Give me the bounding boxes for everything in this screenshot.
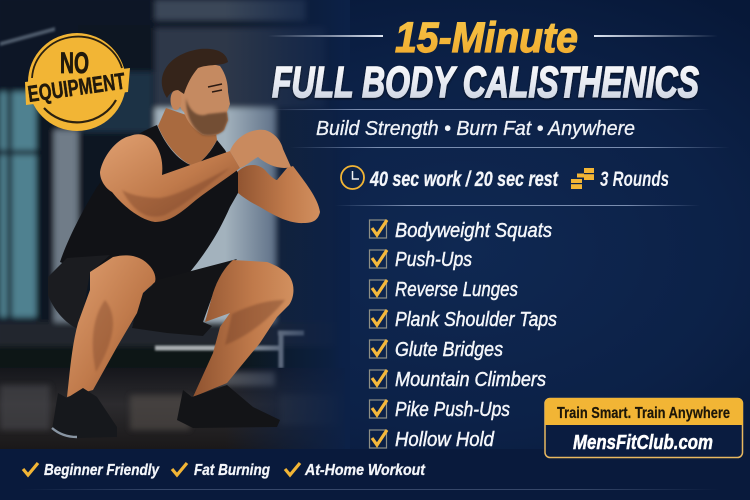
tank top [60,125,238,292]
icon: clock [341,166,364,189]
photo: man in squat [48,49,320,438]
sole highlight [52,428,77,437]
neck [158,108,217,166]
timing: work and rest: 40 sec work / 20 sec rest [369,168,559,191]
gym bench frame [155,333,304,368]
rule left of headline [268,35,383,37]
shorts [48,255,110,330]
ear [170,90,182,110]
right shoe [177,385,280,428]
exercise 6: Mountain Climbers [395,369,546,391]
left shoe [52,388,117,438]
far arm [236,165,320,223]
eye and brow [208,84,222,92]
left leg muscle shading [93,300,113,372]
near arm and shoulder [100,134,240,222]
exercise 8: Hollow Hold [395,429,495,451]
call to action box [545,398,743,458]
checkbox 7 [370,400,387,418]
head [177,64,230,135]
benefit: fat burning: Fat Burning [194,462,270,479]
exercise 5: Glute Bridges [395,339,503,361]
arm muscle shading [122,168,230,217]
badge: no equipment: NO [60,47,89,80]
badge: no equipment: EQUIPMENT [26,68,127,107]
exercise 7: Pike Push-Ups [395,399,510,421]
check: fat burning [172,463,187,475]
exercise 2: Push-Ups [395,249,472,271]
icon: rounds [571,168,594,189]
right leg muscle shading [225,300,285,345]
rule under title [270,109,710,110]
hair [162,49,228,98]
rule right of headline [594,35,718,37]
benefit: at-home workout: At-Home Workout [304,462,426,479]
benefit: beginner friendly: Beginner Friendly [44,462,160,479]
cta website: MensFitClub.com [573,432,713,454]
checkbox 1 [370,220,387,238]
exercise 1: Bodyweight Squats [395,220,552,242]
badge: no equipment [25,33,130,131]
checkbox 8 [370,430,387,448]
checkbox 3 [370,280,387,298]
exercise 4: Plank Shoulder Taps [395,309,557,331]
check: beginner friendly [23,463,38,475]
benefits row [23,462,426,479]
checkbox 6 [370,370,387,388]
photo: gym background [0,0,350,449]
subtitle: Build Strength • Burn Fat • Anywhere [316,118,635,140]
checkbox 5 [370,340,387,358]
beard shading [186,98,228,135]
rule under subtitle [290,147,730,148]
title: 15-Minute: 15-Minute [395,14,578,62]
checkbox 4 [370,310,387,328]
exercise 3: Reverse Lunges [395,279,518,301]
timing: rounds: 3 Rounds [600,168,669,191]
check: at-home workout [285,463,300,475]
checkbox 2 [370,250,387,268]
rule under timing [335,205,700,206]
left leg [67,255,155,397]
exercise list [370,220,557,451]
right leg [193,260,293,397]
bottom band [0,449,750,500]
hands [230,130,291,168]
